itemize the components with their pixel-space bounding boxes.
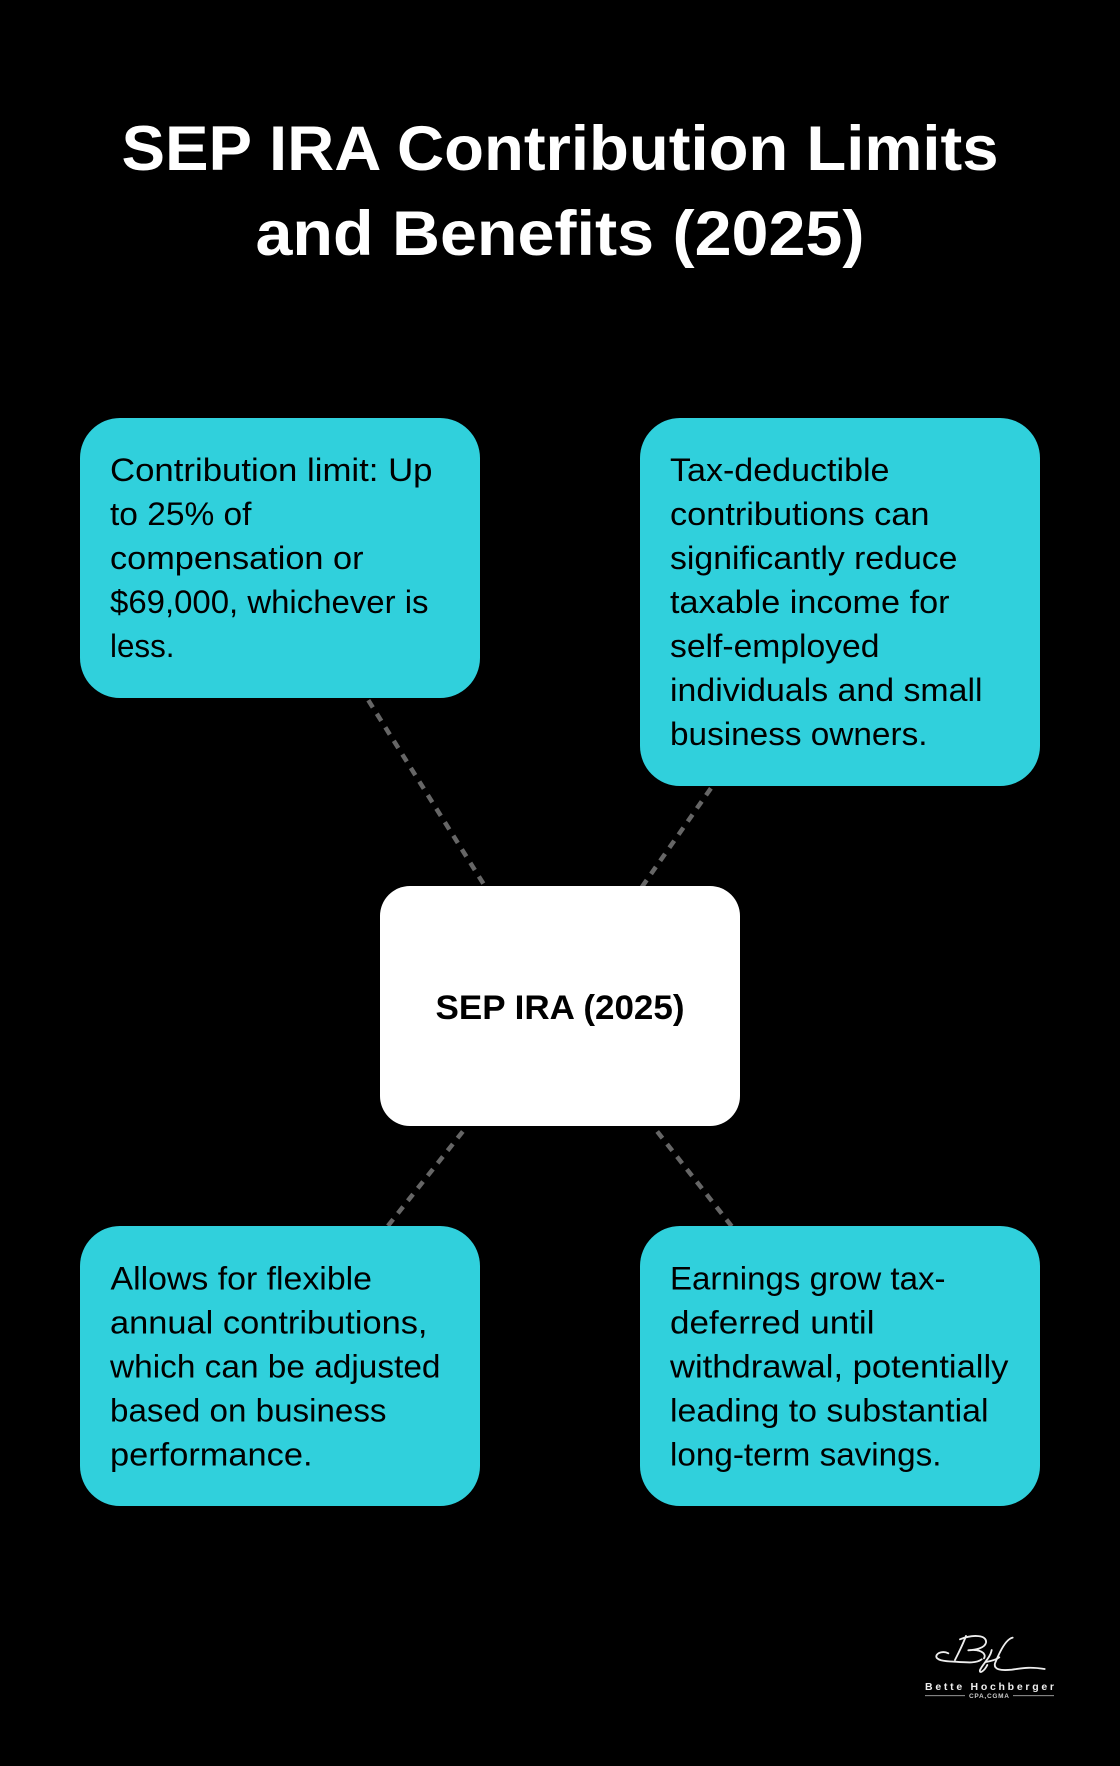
panel: tax-deferred earnings (640, 1226, 1040, 1506)
panel: contribution limit: to 25% of (110, 496, 252, 532)
connector: center to flexible contributions (387, 1132, 463, 1227)
panel: tax-deferred earnings: deferred until (670, 1304, 874, 1340)
panel: contribution limit (80, 418, 480, 698)
panel: tax-deductible contributions (640, 418, 1040, 786)
panel: tax-deductible contributions: taxable income for (670, 584, 950, 620)
connector: tax-deductible to center (641, 788, 711, 888)
connector: center to tax-deferred earnings (657, 1132, 732, 1227)
panel: contribution limit: compensation or (110, 540, 364, 576)
logo: Bette Hochberger signature: CPA,CGMA (969, 1693, 1009, 1700)
panel: flexible annual contributions (80, 1226, 480, 1506)
panel: tax-deductible contributions: business owners. (670, 716, 928, 752)
panel: tax-deferred earnings: leading to substantial (670, 1392, 988, 1428)
logo: Bette Hochberger signature (925, 1636, 1054, 1700)
title (122, 114, 998, 269)
title: SEP IRA Contribution Limits (122, 114, 998, 184)
panel: tax-deductible contributions: significantly reduce (670, 540, 958, 576)
panel: center node (380, 886, 740, 1126)
panel: tax-deferred earnings: long-term savings. (670, 1436, 942, 1472)
panel: tax-deferred earnings: Earnings grow tax- (670, 1260, 946, 1296)
logo: Bette Hochberger signature: Bette Hochberger (925, 1681, 1054, 1693)
panel: flexible annual contributions: performance. (110, 1436, 312, 1472)
panel: contribution limit: Contribution limit: Up (110, 452, 432, 488)
panel: center node: SEP IRA (2025) (436, 989, 684, 1027)
connector: contribution limit to center (368, 700, 484, 885)
panel: contribution limit: $69,000, whichever is (110, 584, 428, 620)
panel: flexible annual contributions: which can be adjusted (109, 1348, 441, 1384)
panel: tax-deductible contributions: self-employed (670, 628, 880, 664)
panel: tax-deductible contributions: contributions can (670, 496, 930, 532)
panel: contribution limit: less. (110, 628, 174, 664)
panel: tax-deductible contributions: individuals and small (670, 672, 982, 708)
panel: tax-deductible contributions: Tax-deductible (670, 452, 890, 488)
panel: flexible annual contributions: annual contributions, (110, 1304, 428, 1340)
title: and Benefits (2025) (256, 199, 864, 269)
panel: flexible annual contributions: Allows for flexible (110, 1260, 372, 1296)
panel: flexible annual contributions: based on business (110, 1392, 386, 1428)
panel: tax-deferred earnings: withdrawal, potentially (669, 1348, 1009, 1384)
